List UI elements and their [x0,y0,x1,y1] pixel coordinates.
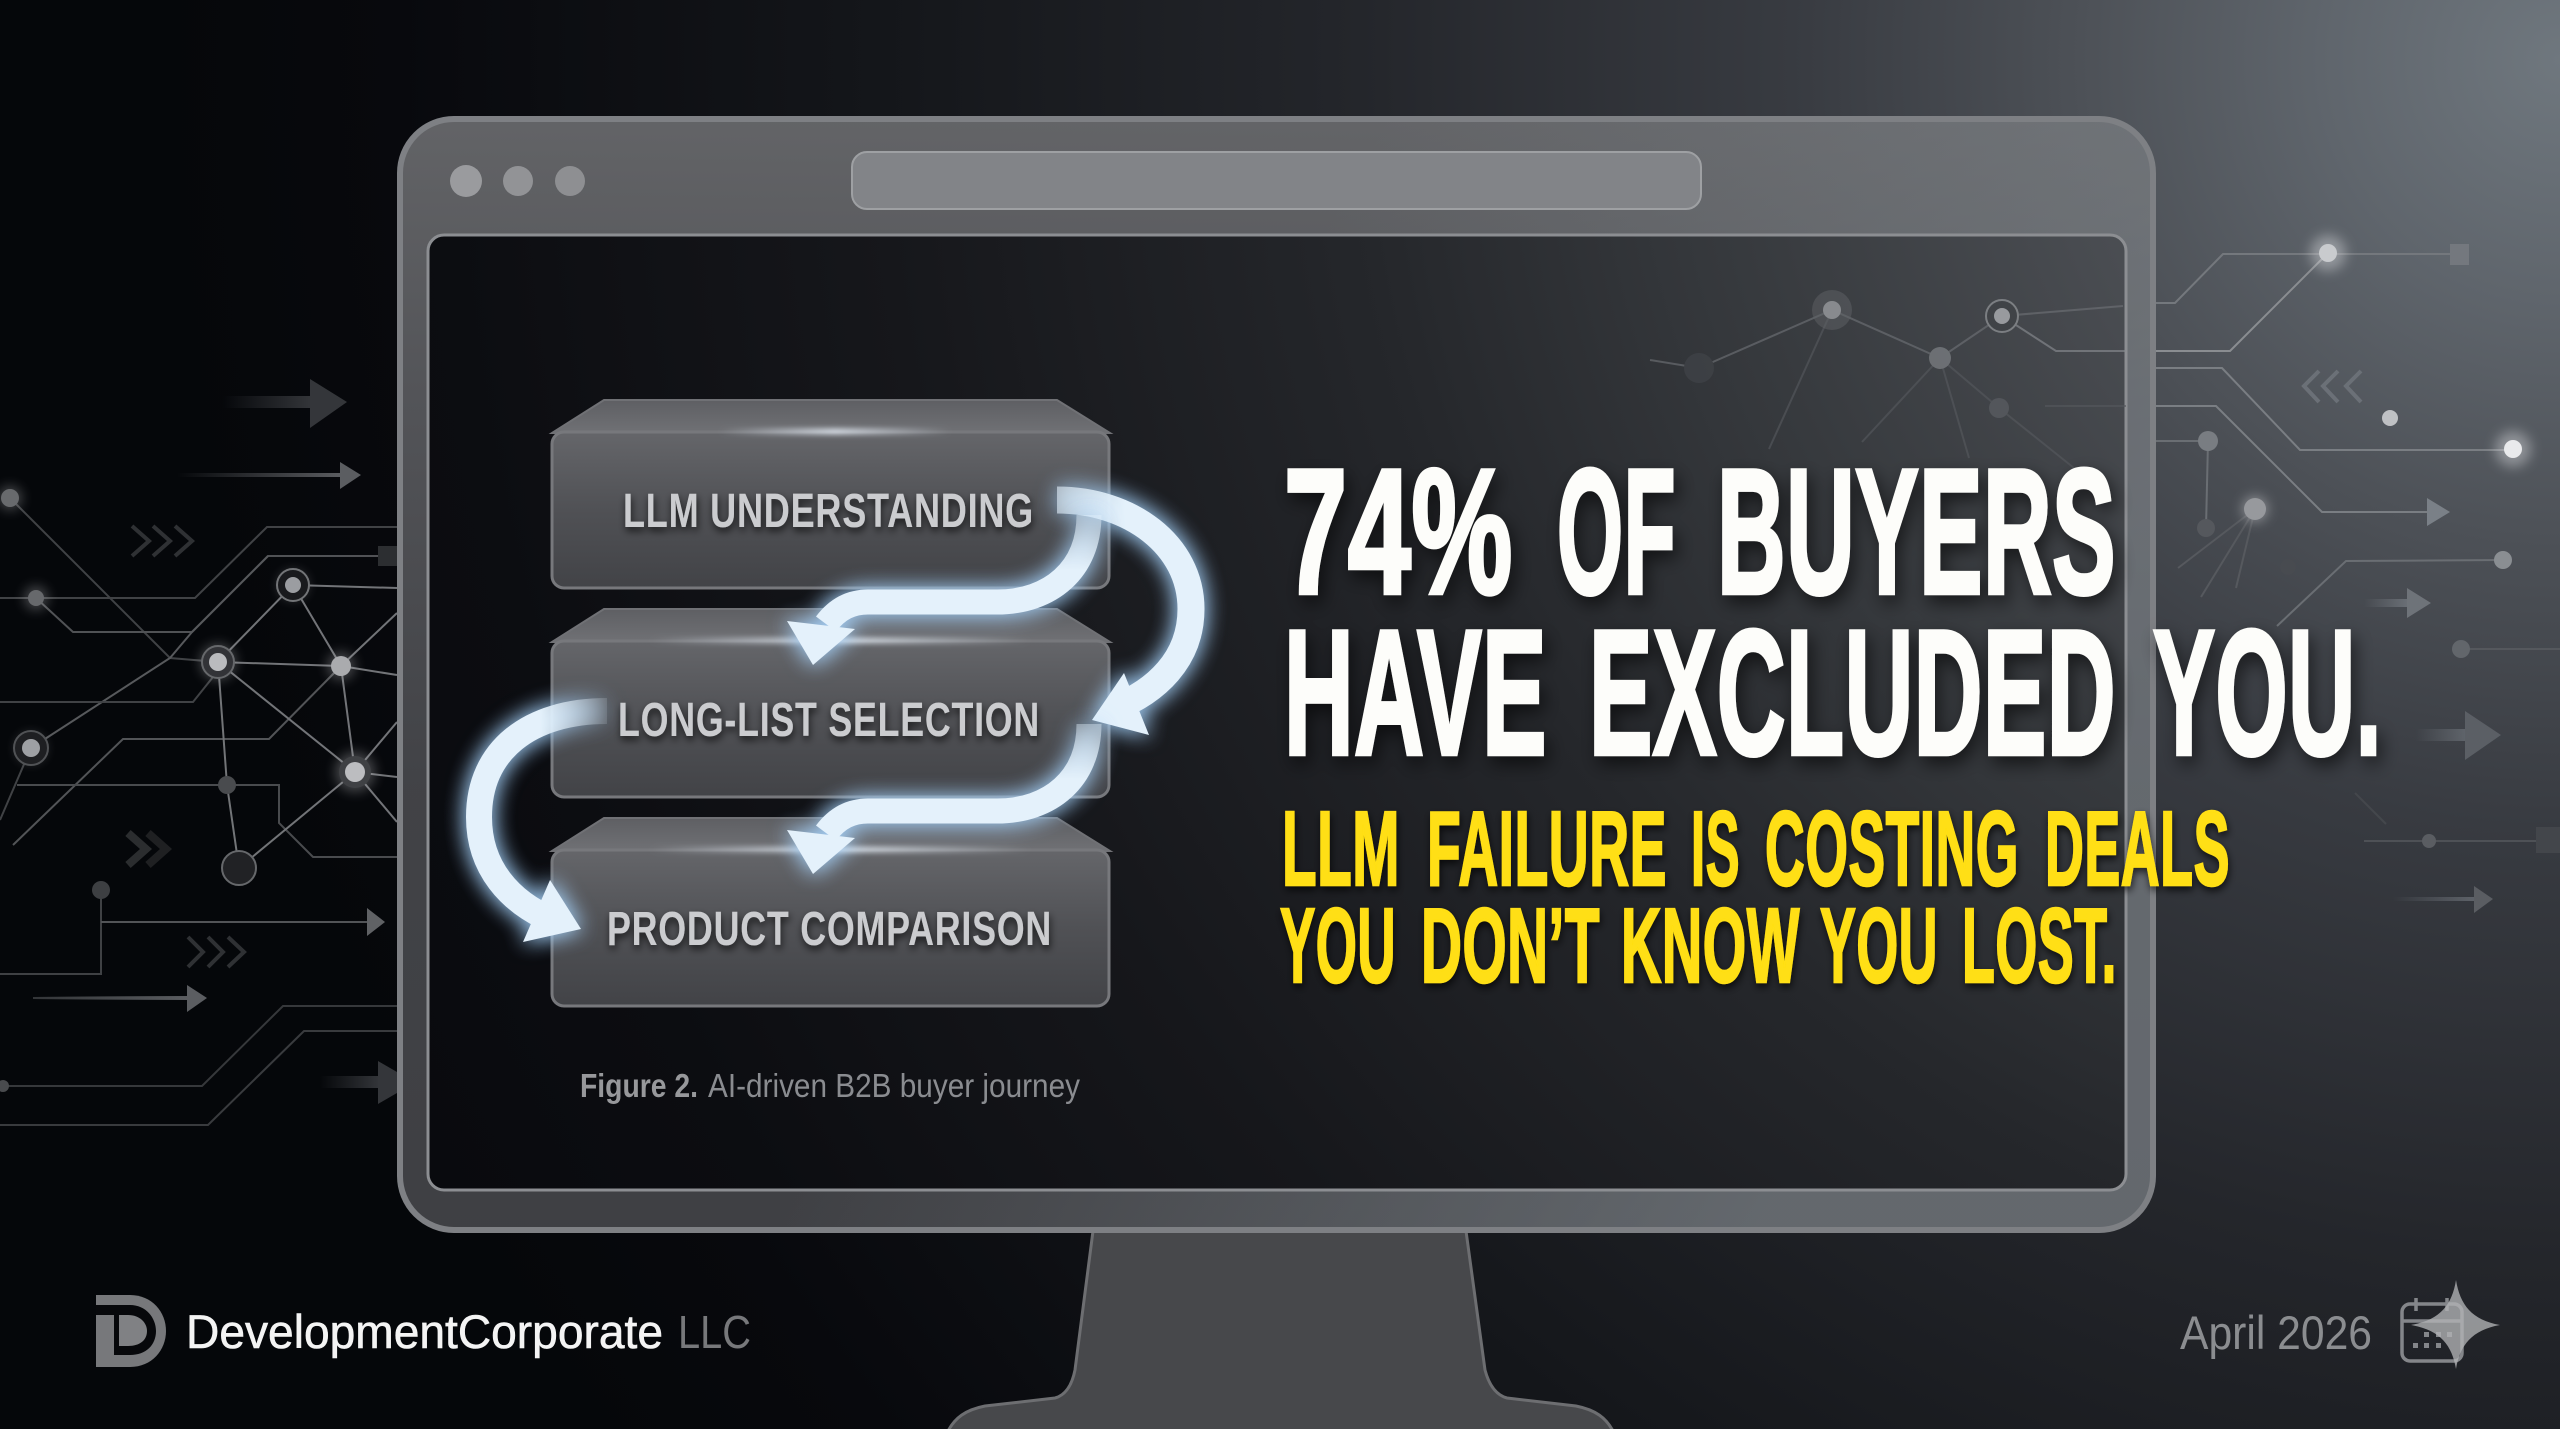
stacked journey diagram [479,400,1191,1006]
subheadline: COSTING [1765,790,2019,908]
right circuit network [2155,235,2560,853]
box: LLM understanding: LLM UNDERSTANDING [623,485,1034,538]
right background arrows [2364,498,2501,913]
subheadline: LLM [1282,790,1400,908]
icon: calendar [2402,1298,2462,1361]
headline: HAVE [1284,593,1547,792]
network inside screen [1650,290,2126,468]
headline: OF [1557,432,1676,631]
window dots [450,165,585,197]
left circuit network [0,486,397,1125]
address bar [852,152,1701,209]
arrow: understanding to selection, inner [787,515,1089,665]
arrow: understanding to selection, outer [1057,500,1191,735]
subheadline: KNOW [1621,887,1800,1005]
left chevrons [128,526,244,967]
headline: EXCLUDED [1589,593,2116,792]
icon: sparkle [2411,1280,2500,1369]
right chevrons [2304,371,2361,402]
left background arrows [33,379,397,1104]
arrow: selection to comparison, outer [479,711,607,942]
subheadline: DEALS [2045,790,2230,908]
box: LLM understanding [552,400,1110,588]
subheadline: IS [1691,790,1740,908]
company suffix: LLC [678,1306,751,1358]
subheadline: LOST. [1962,887,2117,1005]
figure caption: AI-driven B2B buyer journey [708,1067,1080,1104]
headline: 74% [1284,432,1513,631]
subheadline: FAILURE [1427,790,1667,908]
box: product comparison [552,818,1110,1006]
monitor frame [400,119,2153,1230]
box: long-list selection [552,609,1110,797]
subheadline [1280,790,2230,1005]
company logo [96,1295,166,1367]
subheadline: DON’T [1421,887,1600,1005]
arrow: selection to comparison, inner [787,724,1089,874]
company name: DevelopmentCorporate [186,1305,663,1358]
box: product comparison: PRODUCT COMPARISON [607,903,1052,956]
subheadline: YOU [1280,887,1396,1005]
box: long-list selection: LONG-LIST SELECTION [618,694,1040,747]
figure caption: Figure 2. [580,1067,698,1104]
date: April 2026 [2180,1306,2372,1359]
subheadline: YOU [1820,887,1938,1005]
headline [1284,432,2382,792]
headline: BUYERS [1717,432,2116,631]
monitor stand [948,1231,1613,1429]
screen panel [428,235,2126,1190]
